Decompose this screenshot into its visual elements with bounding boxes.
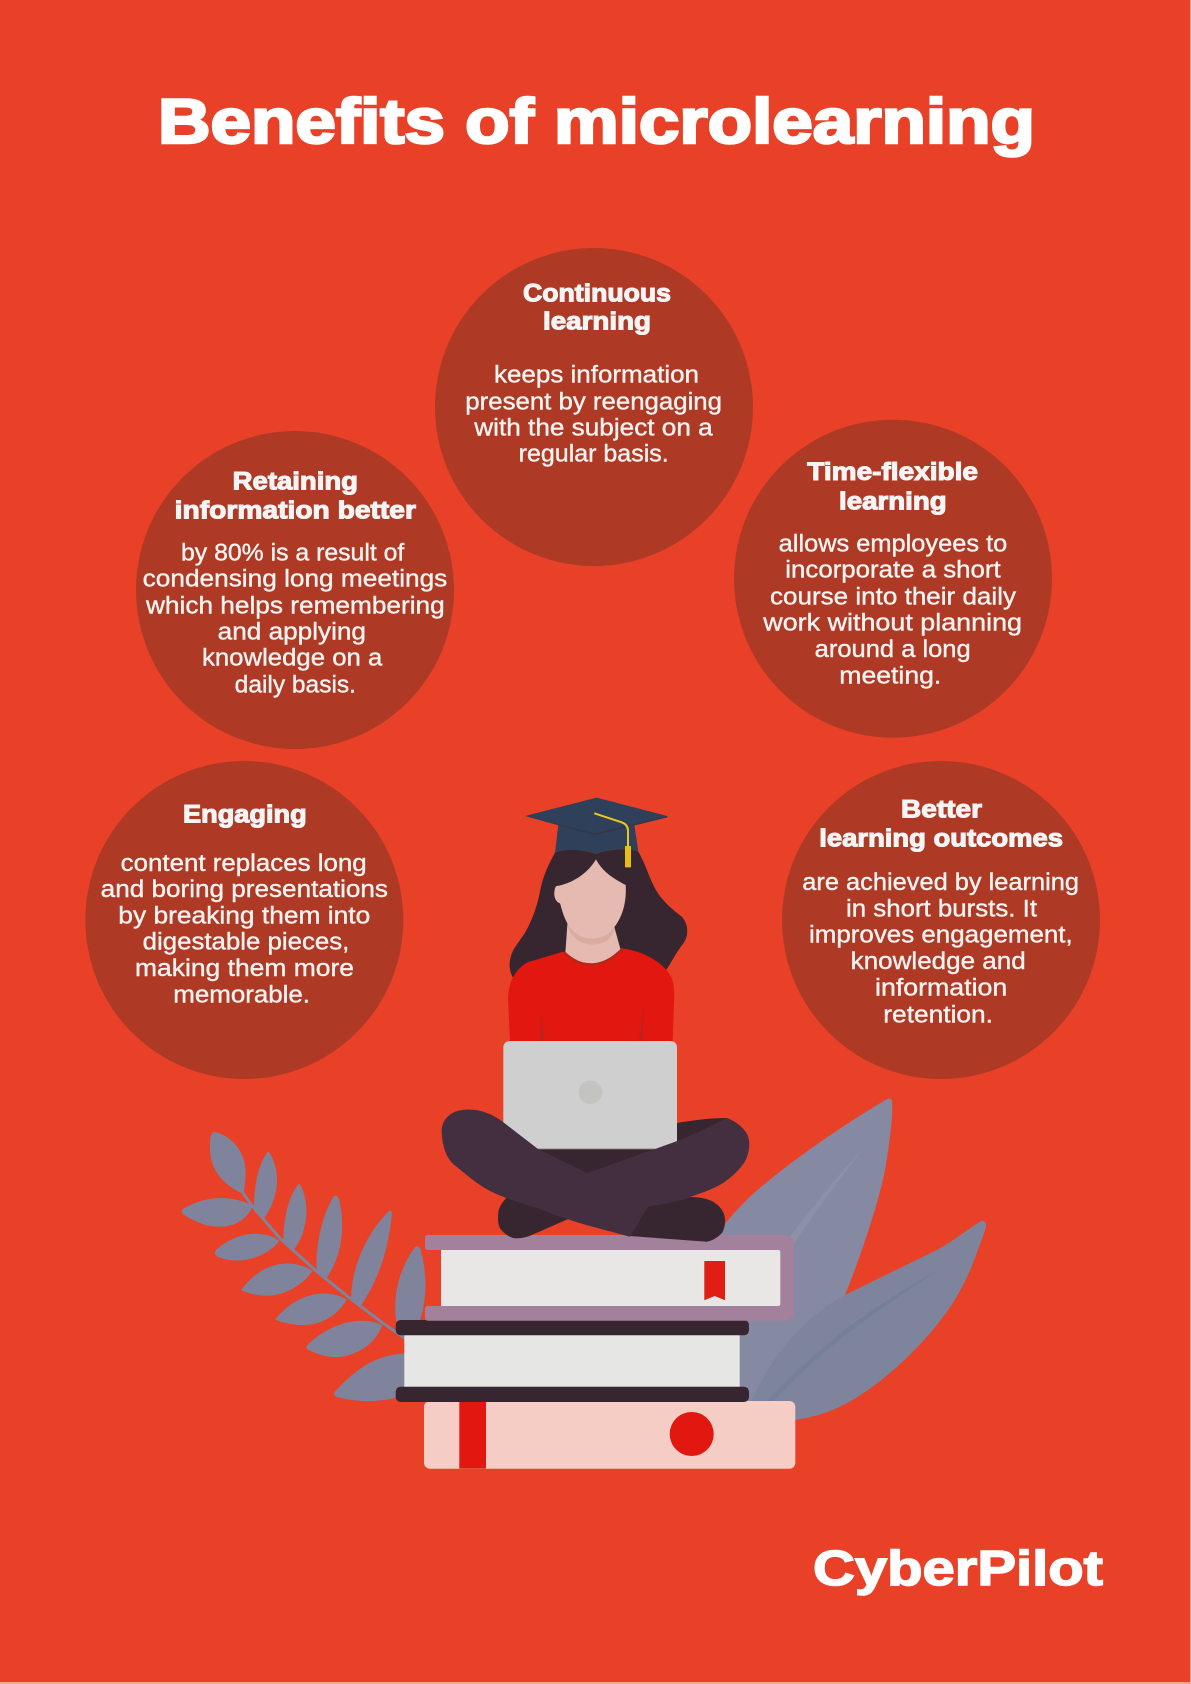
- text: time-flexible description: allows employees to: [779, 531, 1007, 558]
- text: better learning description: in short bursts. It: [846, 895, 1037, 922]
- red sweater: [508, 948, 674, 1042]
- text: retaining description: and applying: [218, 618, 366, 645]
- neck and face: [554, 859, 626, 973]
- text: engaging description: memorable.: [173, 981, 310, 1008]
- text: continuous learning description: keeps information: [494, 362, 699, 389]
- panel: retaining information better: [136, 431, 454, 749]
- text: better learning description: information: [875, 975, 1007, 1002]
- text: retaining description: [143, 540, 447, 698]
- text: engaging description: by breaking them into: [118, 902, 370, 929]
- heading: engaging: Engaging: [183, 801, 307, 829]
- text: better learning description: [802, 869, 1079, 1028]
- text: time-flexible description: incorporate a short: [785, 557, 1001, 584]
- heading: time-flexible learning: learning: [839, 487, 947, 515]
- text: better learning description: are achieved by learning: [802, 869, 1079, 896]
- text: retaining description: which helps remembering: [145, 592, 445, 619]
- text: retaining description: daily basis.: [235, 671, 356, 698]
- panel: time-flexible learning: [734, 420, 1052, 738]
- text: engaging description: [101, 850, 388, 1008]
- text: engaging description: and boring presentations: [101, 876, 388, 903]
- heading: better learning outcomes: learning outcomes: [819, 825, 1063, 853]
- text: continuous learning description: regular basis.: [519, 441, 669, 468]
- text: engaging description: making them more: [135, 955, 354, 982]
- text: better learning description: improves engagement,: [809, 922, 1073, 949]
- lower legs and feet: [498, 1118, 727, 1242]
- icon: leaf branch: [182, 1132, 425, 1401]
- heading: better learning outcomes: Better: [901, 796, 982, 824]
- crossed legs: [442, 1110, 749, 1237]
- panel: continuous learning: [435, 248, 753, 566]
- icon: graduate student with laptop: [442, 798, 749, 1242]
- text: better learning description: retention.: [883, 1001, 993, 1028]
- text: time-flexible description: [762, 531, 1022, 689]
- logo: CyberPilot: CyberPilot: [813, 1542, 1103, 1596]
- text: continuous learning description: present by reengaging: [465, 388, 722, 415]
- text: engaging description: content replaces long: [121, 850, 367, 877]
- middle book: [396, 1320, 749, 1402]
- text: engaging description: digestable pieces,: [143, 929, 349, 956]
- text: time-flexible description: work without planning: [762, 610, 1022, 637]
- hair: [510, 849, 687, 978]
- heading: continuous learning: [523, 280, 671, 335]
- text: better learning description: knowledge and: [851, 948, 1026, 975]
- heading: better learning outcomes: [819, 796, 1063, 853]
- text: time-flexible description: meeting.: [839, 662, 941, 689]
- heading: time-flexible learning: [807, 458, 978, 515]
- heading: retaining information better: information better: [175, 496, 416, 524]
- text: retaining description: knowledge on a: [202, 645, 383, 672]
- panel: better learning outcomes: [782, 761, 1100, 1079]
- text: retaining description: condensing long meetings: [143, 566, 447, 593]
- icon: stack of books: [396, 1235, 795, 1469]
- heading: retaining information better: Retaining: [233, 467, 358, 495]
- heading: retaining information better: [175, 467, 416, 524]
- laptop: [503, 1041, 677, 1150]
- bottom book: [424, 1401, 795, 1469]
- text: time-flexible description: course into their daily: [770, 583, 1016, 610]
- top book with bookmark: [425, 1235, 794, 1321]
- text: continuous learning description: with the subject on a: [473, 415, 713, 442]
- text: continuous learning description: [465, 362, 722, 468]
- text: retaining description: by 80% is a result of: [181, 540, 405, 567]
- icon: large leaves: [717, 1099, 986, 1421]
- heading: time-flexible learning: Time-flexible: [807, 458, 978, 486]
- heading: continuous learning: Continuous: [523, 280, 671, 308]
- text: time-flexible description: around a long: [815, 636, 971, 663]
- panel: engaging: [85, 761, 403, 1079]
- heading: continuous learning: learning: [543, 307, 651, 335]
- title: Benefits of microlearning: [158, 87, 1035, 157]
- graduation cap: [525, 798, 667, 867]
